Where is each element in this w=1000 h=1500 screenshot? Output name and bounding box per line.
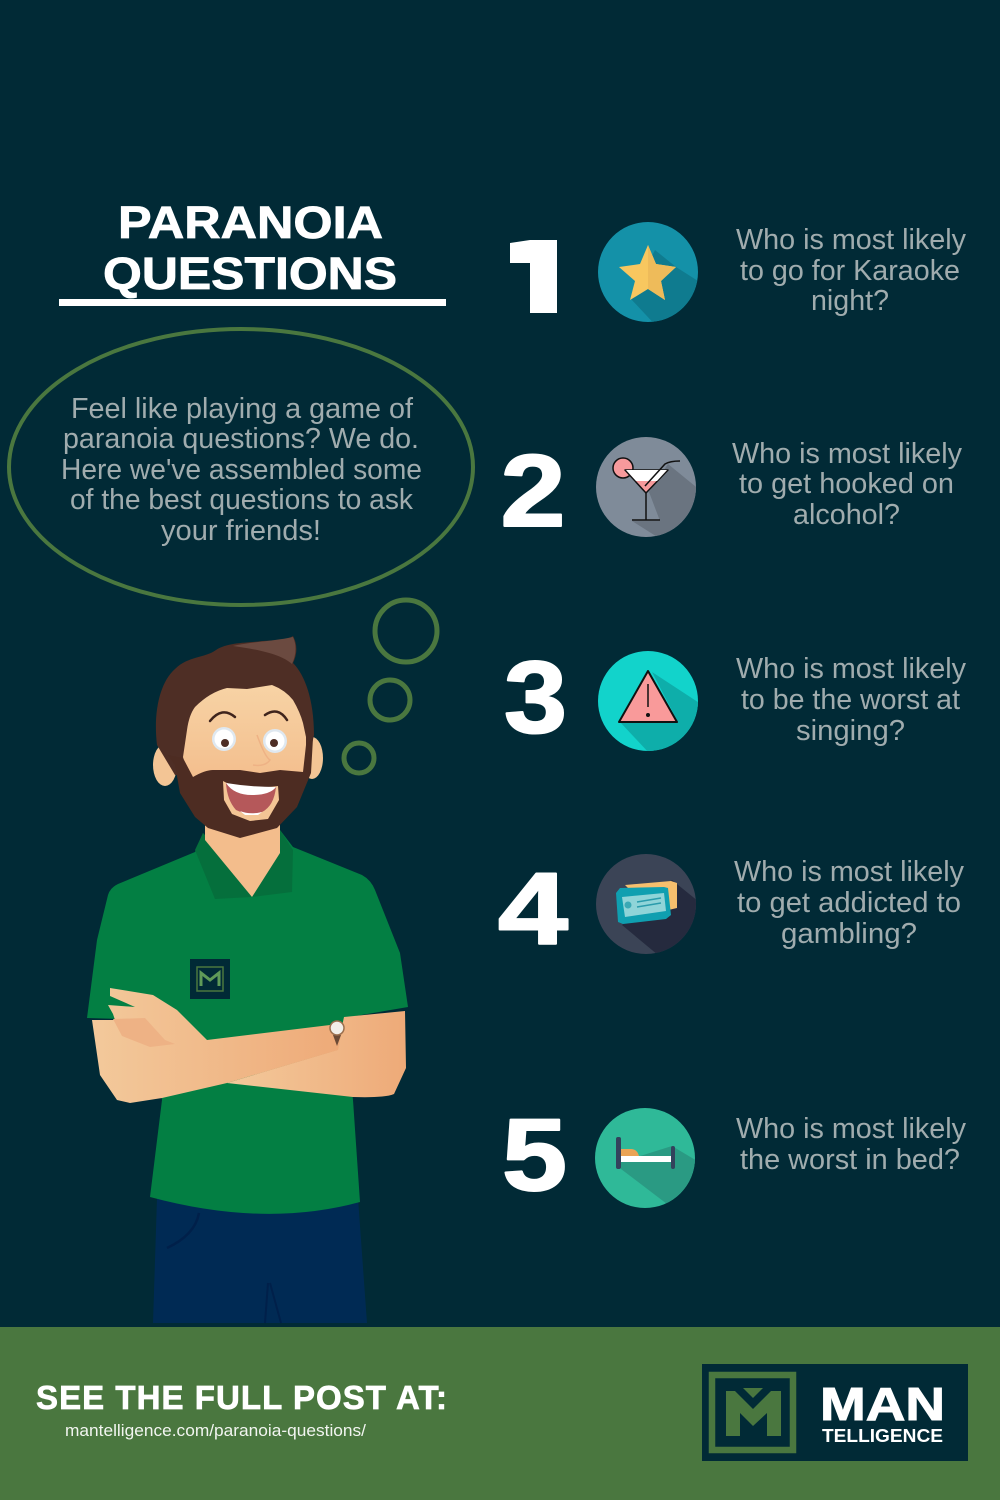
character: bearded man with crossed arms [87,636,408,1323]
eyebrows [210,711,287,721]
question text 4: Who is most likely [734,856,965,888]
question text 5: the worst in bed? [740,1144,960,1176]
beard [168,738,313,838]
icon: tickets [596,854,696,954]
icon: star [598,222,698,322]
question text 3 [736,653,967,747]
footer band [0,1327,1000,1500]
number 1: 1 [515,220,567,334]
question text 5 [736,1113,967,1176]
question text 1: night? [811,285,889,317]
front arm and hand [92,988,342,1103]
thought bubble with intro text: Feel like playing a game of [71,393,413,425]
ears [153,737,323,786]
thought bubble with intro text: Here we've assembled some [61,454,422,486]
question row 1 [510,222,966,322]
footer url: mantelligence.com/paranoia-questions/ [65,1421,366,1440]
question text 4: to get addicted to [737,887,961,919]
question text 4 [734,856,965,950]
icon: cocktail [596,437,696,537]
wristwatch [330,1021,344,1046]
title: QUESTIONS [103,248,397,299]
number 4: 4 [498,852,568,966]
question row 3 [506,651,966,751]
footer call to action: SEE THE FULL POST AT: [36,1379,447,1416]
logo [702,1364,968,1461]
question row 5 [504,1108,966,1208]
question row 4 [498,854,964,954]
thought bubble with intro text [9,329,473,605]
neck [205,815,280,898]
hair [156,636,314,775]
number 3: 3 [504,640,567,754]
face [183,685,306,785]
logo: MAN [820,1378,945,1430]
logo: TELLIGENCE [822,1426,943,1446]
finger shading [113,1018,175,1047]
thought bubble with intro text: your friends! [161,515,321,547]
title [59,197,446,306]
question text 3: Who is most likely [736,653,967,685]
question text 4: gambling? [781,918,917,950]
question text 2: Who is most likely [732,438,963,470]
number 1 [510,240,557,313]
icon: warning triangle [598,651,698,751]
question text 5: Who is most likely [736,1113,967,1145]
back arm [227,1011,406,1097]
number 2: 2 [500,434,566,548]
question text 1: Who is most likely [736,224,967,256]
question row 2 [503,437,962,537]
mouth [223,781,279,821]
trousers [153,1198,367,1323]
hair highlight [233,637,296,664]
thought bubble with intro text: of the best questions to ask [70,484,414,516]
question text 2 [732,438,963,531]
nose [253,735,270,765]
question text 1 [736,224,967,317]
shirt logo badge [190,959,230,999]
question text 2: to get hooked on [739,468,954,500]
green shirt [87,828,408,1214]
eyes [212,727,287,753]
question text 3: singing? [796,715,905,747]
thought bubble with intro text: paranoia questions? We do. [63,423,419,455]
question text 1: to go for Karaoke [740,255,960,287]
question text 3: to be the worst at [741,684,960,716]
icon: bed [595,1108,695,1208]
title: PARANOIA [118,197,383,248]
thought bubble trail circles [344,600,437,773]
question text 2: alcohol? [793,499,900,531]
number 5: 5 [502,1098,567,1212]
